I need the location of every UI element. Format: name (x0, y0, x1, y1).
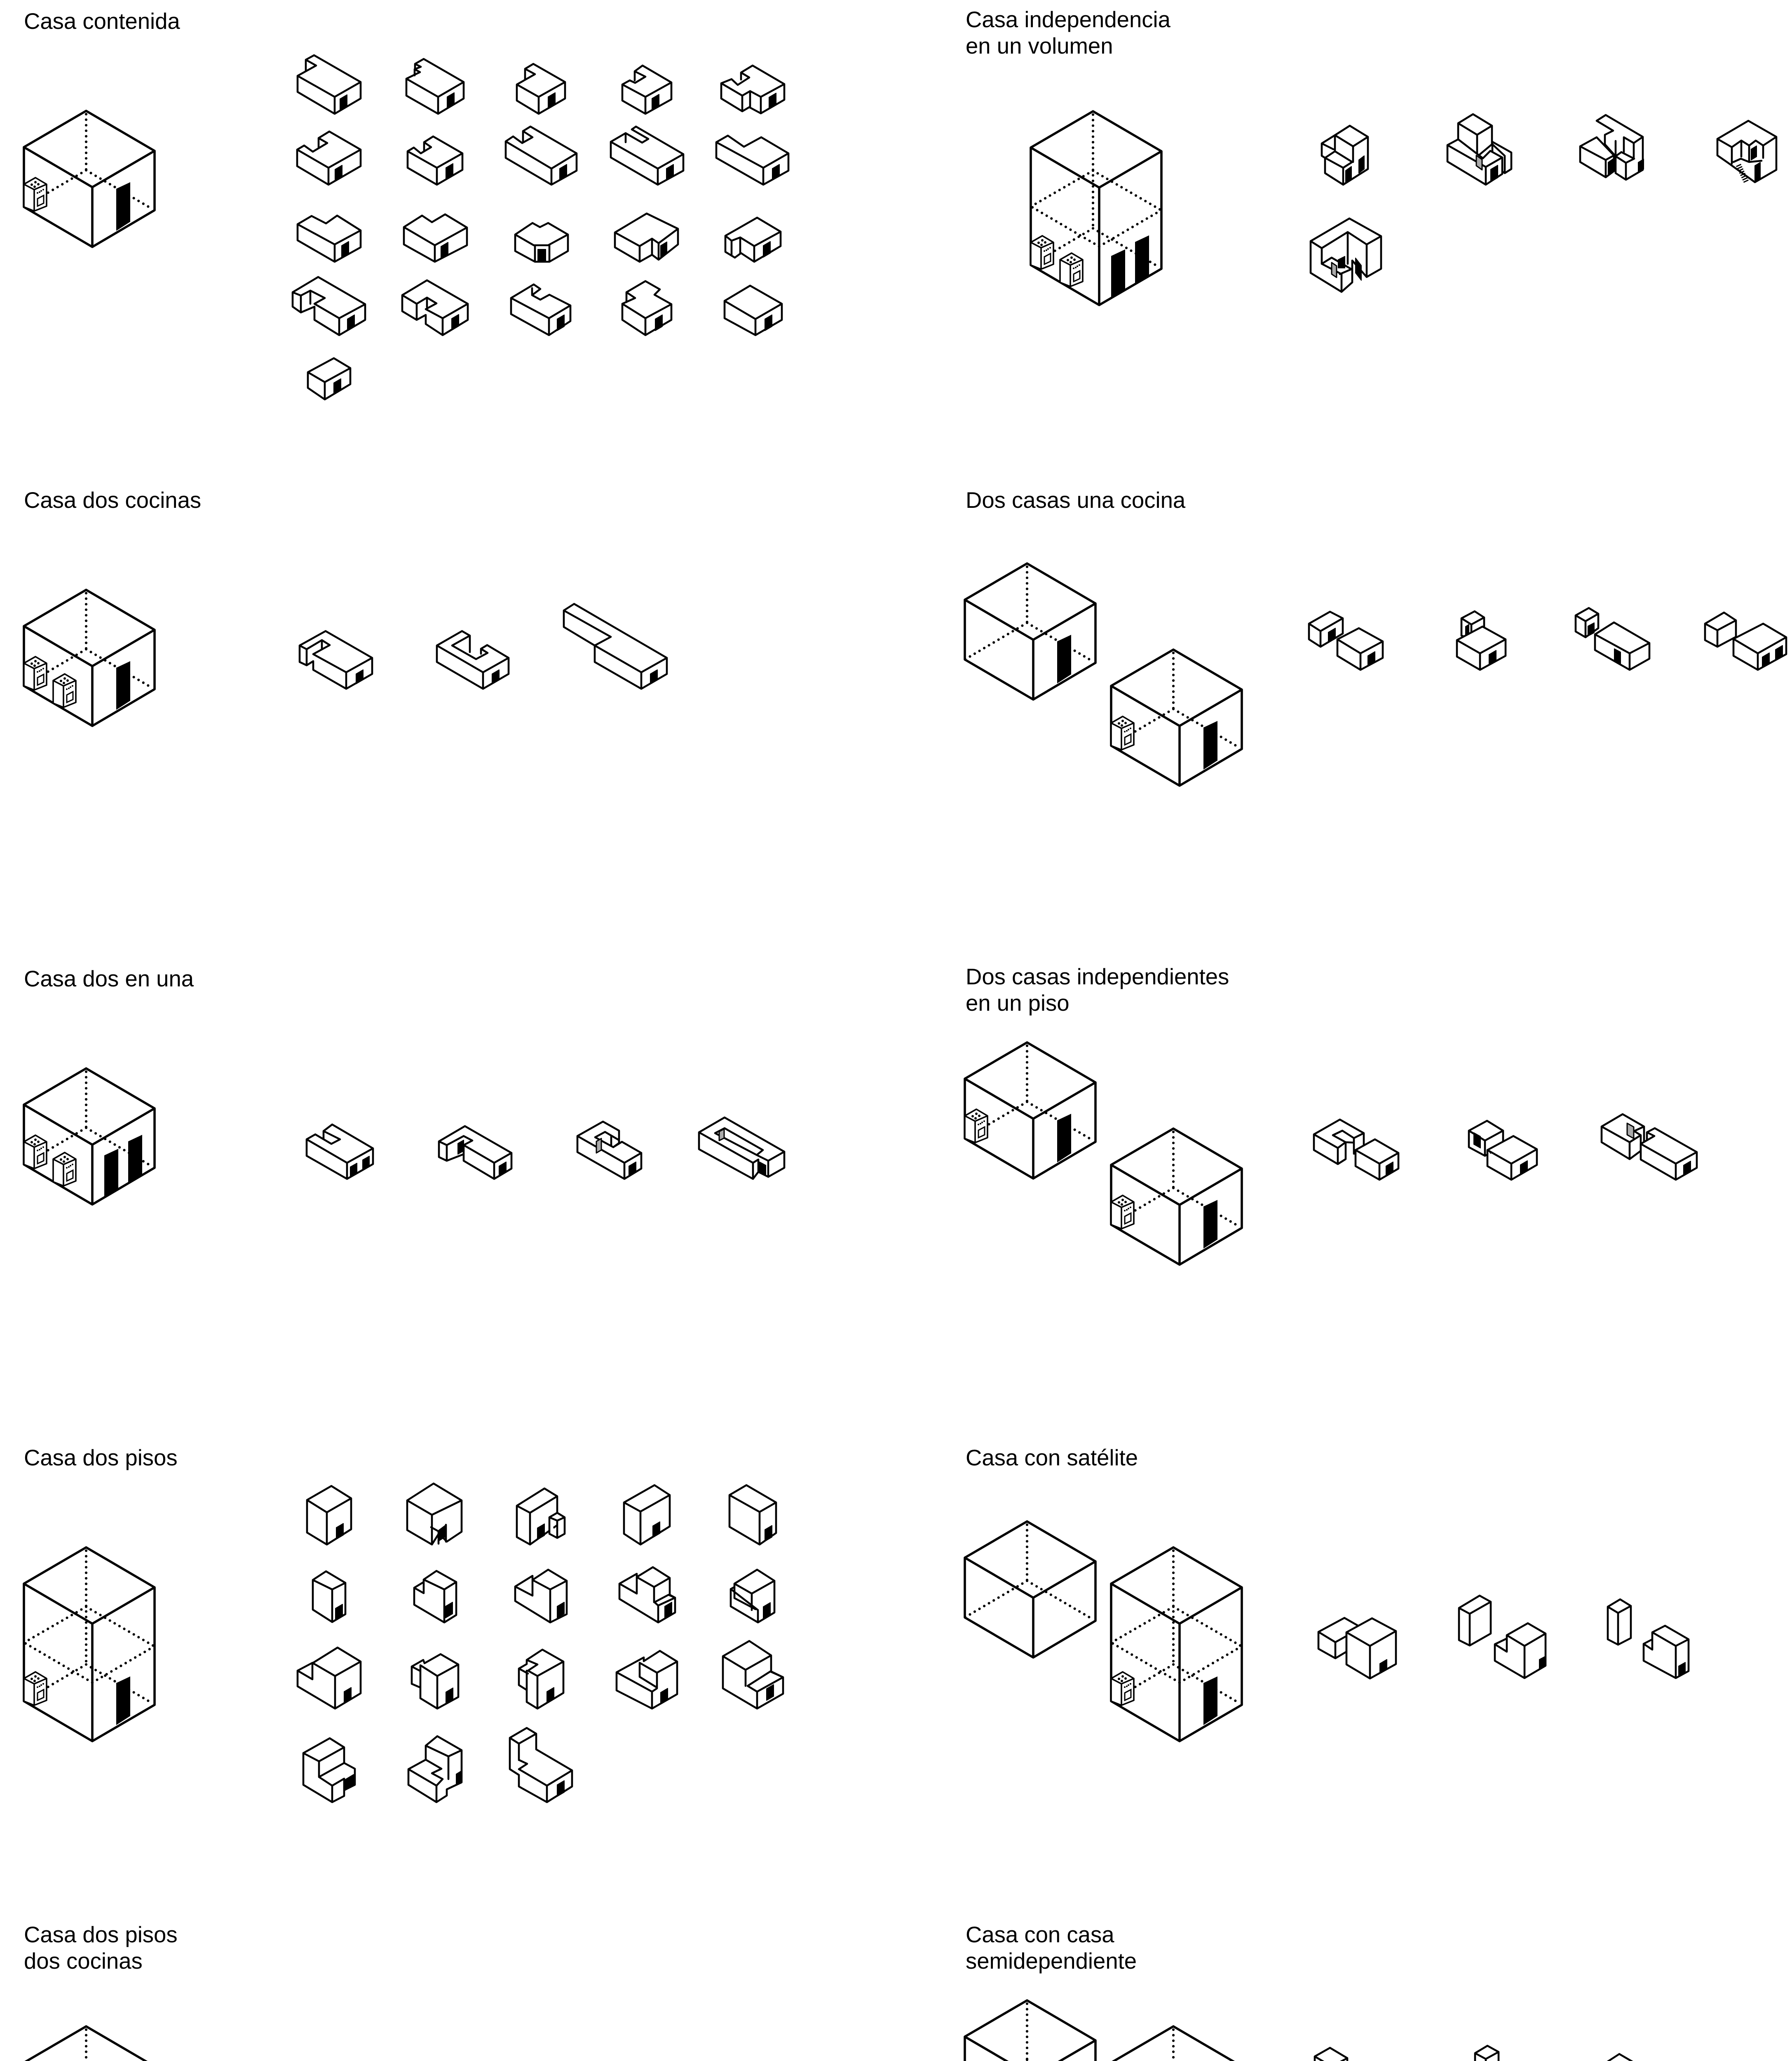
icon: house 5 (721, 66, 784, 113)
icon: pair 3 (1576, 608, 1649, 670)
icon: tower 1 (307, 1486, 351, 1545)
panel: Casa dos en una (24, 966, 784, 1204)
icon: stacked volumes 5 (1311, 218, 1381, 292)
heading: Casa dos pisos (24, 1922, 178, 1947)
icon: pair 4 (1705, 613, 1786, 670)
heading: en un volumen (966, 33, 1113, 59)
icon: stacked volumes 4 (1717, 121, 1776, 183)
icon: stacked volumes 2 (1447, 114, 1511, 185)
icon: house 11 (298, 216, 361, 262)
icon: house 9 (611, 127, 683, 185)
icon: tower 5 (729, 1485, 776, 1545)
icon: tower 10 (731, 1570, 774, 1622)
icon: pair 2 (1469, 1121, 1537, 1180)
icon: house 10 (716, 136, 788, 185)
icon: house 8 (506, 127, 577, 185)
prototype cube B (1111, 650, 1242, 786)
icon: house 14 (615, 214, 678, 262)
heading: Casa dos en una (24, 966, 194, 991)
icon: house 3 (517, 64, 565, 114)
house icons (307, 1117, 784, 1179)
heading: Casa contenida (24, 9, 180, 34)
icon: stacked volumes 3 (1580, 115, 1644, 180)
heading: Casa con casa (966, 1922, 1114, 1947)
icon: pair 3 (1602, 1114, 1697, 1180)
heading: dos cocinas (24, 1948, 143, 1974)
icon: tower 14 (617, 1651, 677, 1709)
icon: house 6 (297, 131, 361, 185)
icon: tower 9 (619, 1567, 675, 1622)
panel: Casa dos pisos dos cocinas (24, 1922, 771, 2061)
icon: tower 12 (412, 1654, 458, 1709)
icon: satellite pair 2 (1459, 1596, 1546, 1678)
icon: tower 15 (723, 1641, 783, 1709)
heading: Casa dos cocinas (24, 488, 201, 513)
house icons (1314, 1114, 1697, 1180)
prototype cube (24, 590, 155, 726)
prototype cube (24, 2026, 155, 2061)
heading: Casa dos pisos (24, 1445, 178, 1470)
icon: tower 4 (624, 1485, 670, 1545)
icon: house 1 (298, 55, 361, 114)
house icons (1318, 1596, 1689, 1678)
icon: pair 2 (1457, 611, 1506, 670)
panel: Dos casas independientes en un piso (965, 964, 1697, 1265)
icon: house with arm and doors (439, 1126, 511, 1179)
icon: satellite pair 1 (1318, 1618, 1396, 1678)
icon: tower 8 (515, 1570, 567, 1622)
prototype cube A (965, 563, 1095, 700)
icon: house 20 (725, 286, 782, 335)
icon: house 12 (404, 214, 467, 262)
icon: house 18 (511, 284, 570, 335)
icon: stacked volumes 1 (1322, 126, 1368, 185)
heading: Casa con satélite (966, 1445, 1138, 1470)
prototype cube (24, 111, 155, 247)
icon: tower 11 (298, 1648, 361, 1709)
house icons (1311, 114, 1776, 292)
prototype cube A (965, 2000, 1095, 2061)
icon: tower with small volume (517, 1488, 565, 1545)
icon: U-shaped house (437, 631, 509, 689)
house icons (1309, 608, 1786, 670)
panel: Casa contenida (24, 9, 788, 399)
house icons (293, 55, 788, 399)
icon: long house with slot (699, 1117, 784, 1179)
panel: Casa independencia en un volumen (966, 7, 1776, 305)
icon: house with arm (300, 631, 372, 689)
panel: Casa dos pisos (24, 1445, 783, 1802)
prototype cube B (1111, 1129, 1242, 1265)
icon: pair 1 (1309, 612, 1383, 670)
icon: house 15 (725, 218, 781, 262)
heading: en un piso (966, 991, 1070, 1016)
icon: satellite pair 3 (1608, 1599, 1689, 1678)
heading: semidependiente (966, 1948, 1137, 1974)
house icons (298, 1484, 783, 1802)
icon: semi pair 3 (1592, 2054, 1659, 2061)
icon: house 17 (402, 280, 468, 335)
prototype cube A (965, 1042, 1095, 1178)
icon: long house (564, 604, 667, 689)
icon: tower 7 (414, 1571, 456, 1622)
icon: tower 6 (313, 1571, 345, 1622)
prototype cube B (1111, 2026, 1242, 2061)
icon: tower 16 (303, 1738, 355, 1802)
icon: tower 13 (519, 1650, 563, 1709)
icon: tower 17 (408, 1736, 462, 1802)
icon: house 21 (308, 358, 350, 399)
icon: house 2 (406, 59, 464, 114)
panel: Casa con casa semidependiente (965, 1922, 1727, 2061)
prototype cube A (965, 1521, 1095, 1657)
icon: house 13 (515, 223, 568, 262)
icon: tower 18 (510, 1728, 572, 1802)
panel: Casa con satélite (965, 1445, 1689, 1741)
icon: pair 1 (1314, 1120, 1398, 1180)
icon: house two doors (307, 1124, 373, 1179)
icon: tower 2 (407, 1484, 462, 1545)
icon: house 19 (622, 281, 671, 335)
heading: Dos casas independientes (966, 964, 1229, 989)
prototype cube (1031, 111, 1161, 305)
house icons (300, 604, 667, 689)
heading: Casa independencia (966, 7, 1170, 32)
icon: semi pair 2 (1462, 2046, 1543, 2061)
panel: Dos casas una cocina (965, 488, 1786, 786)
prototype cube (24, 1547, 155, 1741)
house icons (1315, 2046, 1727, 2061)
prototype cube B (1111, 1547, 1242, 1741)
icon: house with patio and stair (577, 1122, 641, 1179)
icon: semi pair 1 (1315, 2048, 1399, 2061)
heading: Dos casas una cocina (966, 488, 1186, 513)
panel: Casa dos cocinas (24, 488, 667, 726)
icon: house 16 (293, 277, 365, 335)
prototype cube (24, 1068, 155, 1204)
icon: house 4 (622, 66, 671, 114)
icon: house 7 (408, 136, 462, 185)
